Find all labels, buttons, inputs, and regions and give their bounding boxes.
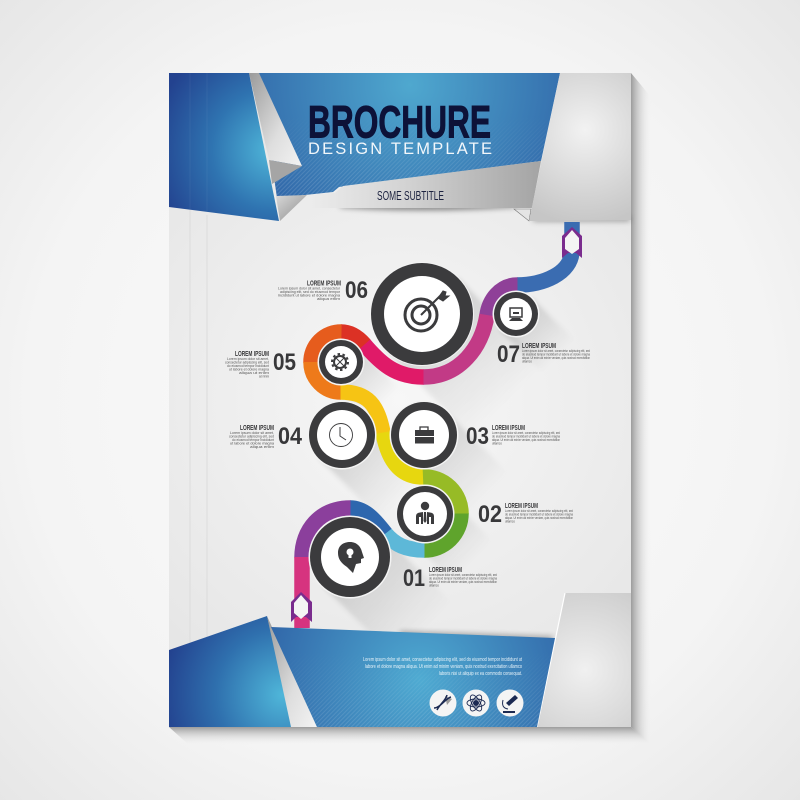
label 04: LOREM IPSUM bbox=[240, 425, 274, 432]
paragraph 04: aliqua enim bbox=[250, 445, 274, 449]
shadow above footer bbox=[400, 632, 555, 640]
icon: target with arrow bbox=[405, 291, 449, 331]
arrow marker bottom bbox=[291, 592, 312, 622]
number 04: 04 bbox=[278, 423, 303, 450]
step 01 bbox=[308, 516, 497, 598]
segment: amber bbox=[340, 392, 383, 433]
top right silver panel bbox=[529, 73, 631, 221]
arrow marker top bbox=[562, 227, 582, 258]
header main blue panel bbox=[259, 73, 560, 198]
segment: pink bbox=[294, 557, 310, 628]
paragraph 06: Lorem ipsum dolor sit amet, consectetur bbox=[278, 286, 341, 290]
lower paper folds bbox=[269, 160, 307, 221]
paragraph 04: consectetur adipiscing elit, sed bbox=[229, 434, 274, 438]
segment: magenta bbox=[423, 315, 487, 377]
segment: top blue bbox=[517, 222, 572, 285]
segment: yellow bbox=[383, 432, 424, 477]
step 05 bbox=[225, 338, 364, 386]
paragraph 06: adipiscing elit, sed do eiusmod tempor bbox=[280, 290, 341, 294]
paragraph 06 bbox=[278, 286, 341, 301]
icon: head with light bulb bbox=[338, 542, 364, 573]
top left blue panel bbox=[169, 73, 279, 221]
left panel crease lines bbox=[190, 73, 207, 211]
label 02: LOREM IPSUM bbox=[505, 503, 538, 510]
segment: orange bbox=[311, 362, 341, 392]
bottom main blue panel bbox=[271, 627, 555, 727]
paragraph 03 bbox=[492, 431, 560, 446]
subtitle: design template: DESIGN TEMPLATE bbox=[308, 140, 492, 158]
bottom right silver panel bbox=[537, 593, 631, 727]
shadow under header bbox=[340, 204, 630, 221]
number 06: 06 bbox=[345, 277, 368, 304]
paragraph 07: aliqua. Ut enim ad minim veniam, quis nostrud exercitation bbox=[522, 356, 590, 360]
icon: person in suit bbox=[416, 502, 434, 524]
paragraph 03: do eiusmod tempor incididunt ut labore et dolore magna bbox=[492, 434, 560, 438]
segment: light blue bbox=[385, 533, 424, 550]
ribbon path bbox=[302, 222, 572, 628]
step 02 bbox=[396, 484, 573, 544]
ring 02 bbox=[396, 484, 454, 544]
paragraph 02: ullamco bbox=[505, 520, 515, 524]
step 07 bbox=[492, 290, 590, 368]
segment: red orange bbox=[311, 332, 342, 362]
paragraph 07: do eiusmod tempor incididunt ut labore et dolore magna bbox=[522, 352, 590, 356]
silver subtitle band bbox=[300, 161, 541, 208]
label 05: LOREM IPSUM bbox=[235, 351, 269, 358]
paragraph 05: do eiusmod tempor incididunt bbox=[227, 364, 269, 368]
paragraph 02: aliqua. Ut enim ad minim veniam, quis nostrud exercitation bbox=[505, 516, 573, 520]
number 03: 03 bbox=[466, 423, 489, 450]
icon: gear bbox=[332, 354, 348, 370]
silver panel highlight edge bbox=[537, 593, 565, 727]
bottom left blue panel bbox=[169, 616, 291, 727]
number 05: 05 bbox=[273, 349, 296, 376]
paragraph 06: aliqua enim bbox=[317, 297, 340, 301]
panel: footer bbox=[169, 593, 631, 727]
number 01: 01 bbox=[403, 565, 425, 592]
ring 01 bbox=[308, 516, 392, 598]
icon: DNA bbox=[430, 690, 456, 716]
paragraph 05: consectetur adipiscing elit, sed bbox=[225, 360, 269, 364]
paragraph 05: ad minim bbox=[259, 374, 269, 378]
paragraph 07: ullamco bbox=[522, 360, 532, 364]
long shadows of circles bbox=[323, 280, 560, 632]
step 03 bbox=[390, 400, 560, 470]
number 02: 02 bbox=[478, 501, 502, 528]
label 07: LOREM IPSUM bbox=[522, 343, 556, 350]
ring 03 bbox=[390, 400, 458, 470]
brochure drop shadow bbox=[169, 73, 651, 745]
icon: atom bbox=[462, 690, 490, 716]
footer paragraph: laboris nisi ut aliquip ex ea commodo consequat. bbox=[439, 671, 522, 677]
segment: purple bbox=[487, 285, 518, 316]
upper paper fold bbox=[249, 73, 302, 166]
label 01: LOREM IPSUM bbox=[429, 567, 462, 574]
paragraph 01: ullamco bbox=[429, 584, 439, 588]
paragraph 07: Lorem ipsum dolor sit amet, consectetur adipiscing elit, sed bbox=[522, 349, 590, 353]
footer paragraph bbox=[363, 657, 522, 677]
segment: green bbox=[424, 514, 461, 550]
icon: briefcase bbox=[415, 427, 434, 444]
paragraph 01: Lorem ipsum dolor sit amet, consectetur adipiscing elit, sed bbox=[429, 573, 497, 577]
ring 05 bbox=[318, 338, 364, 386]
panel: header bbox=[169, 73, 631, 221]
number 07: 07 bbox=[497, 341, 520, 368]
paragraph 07 bbox=[522, 349, 590, 364]
title: BROCHURE bbox=[308, 96, 491, 148]
segment: blue bbox=[350, 508, 386, 534]
paragraph 01: aliqua. Ut enim ad minim veniam, quis nostrud exercitation bbox=[429, 580, 497, 584]
paragraph 02: Lorem ipsum dolor sit amet, consectetur adipiscing elit, sed bbox=[505, 509, 573, 513]
header stripe texture bbox=[275, 138, 546, 196]
ring 04 bbox=[308, 400, 376, 470]
step 04 bbox=[229, 400, 376, 470]
paragraph 05: aliqua ut enim bbox=[239, 371, 270, 375]
icon: clock bbox=[330, 424, 352, 446]
paragraph 04: Lorem ipsum dolor sit amet, bbox=[230, 431, 274, 435]
segment: crimson bbox=[364, 344, 424, 377]
step 06 bbox=[278, 262, 474, 366]
ring 06 bbox=[370, 262, 474, 366]
ring 07 bbox=[492, 290, 540, 338]
footer paragraph: Lorem ipsum dolor sit amet, consectetur adipiscing elit, sed do eiusmod tempor incididunt ut bbox=[363, 657, 522, 663]
paragraph 05 bbox=[225, 357, 270, 378]
some subtitle: SOME SUBTITLE bbox=[377, 189, 444, 203]
paragraph 01: do eiusmod tempor incididunt ut labore et dolore magna bbox=[429, 576, 497, 580]
paragraph 05: Lorem ipsum dolor sit amet, bbox=[227, 357, 269, 361]
small corner fold bbox=[514, 209, 531, 221]
segment: red bbox=[341, 332, 364, 344]
icon: microscope bbox=[496, 690, 524, 716]
label 03: LOREM IPSUM bbox=[492, 425, 525, 432]
paragraph 03: Lorem ipsum dolor sit amet, consectetur adipiscing elit, sed bbox=[492, 431, 560, 435]
bottom fold bbox=[267, 616, 317, 727]
paragraph 01 bbox=[429, 573, 497, 588]
paragraph 03: ullamco bbox=[492, 442, 502, 446]
paragraph 06: incididunt ut labore et dolore magna bbox=[278, 294, 340, 298]
segment: purple lower bbox=[302, 508, 350, 558]
paragraph 05: ut labore et dolore magna bbox=[229, 368, 269, 372]
paragraph 03: aliqua. Ut enim ad minim veniam, quis nostrud exercitation bbox=[492, 438, 560, 442]
paragraph 04: ut labore et dolore magna bbox=[230, 442, 274, 446]
footer stripe texture bbox=[294, 676, 546, 727]
footer paragraph: labore et dolore magna aliqua. Ut enim ad minim veniam, quis nostrud exercitation ullamco bbox=[365, 664, 522, 670]
page fold lines bbox=[190, 210, 207, 660]
icon: laptop bbox=[509, 308, 523, 321]
paragraph 02: do eiusmod tempor incididunt ut labore et dolore magna bbox=[505, 512, 573, 516]
paragraph 04 bbox=[229, 431, 274, 449]
brochure page bbox=[169, 73, 631, 727]
label 06: LOREM IPSUM bbox=[307, 280, 341, 288]
paragraph 02 bbox=[505, 509, 573, 524]
paragraph 04: do eiusmod tempor incididunt bbox=[232, 438, 274, 442]
segment: light green bbox=[423, 477, 461, 514]
